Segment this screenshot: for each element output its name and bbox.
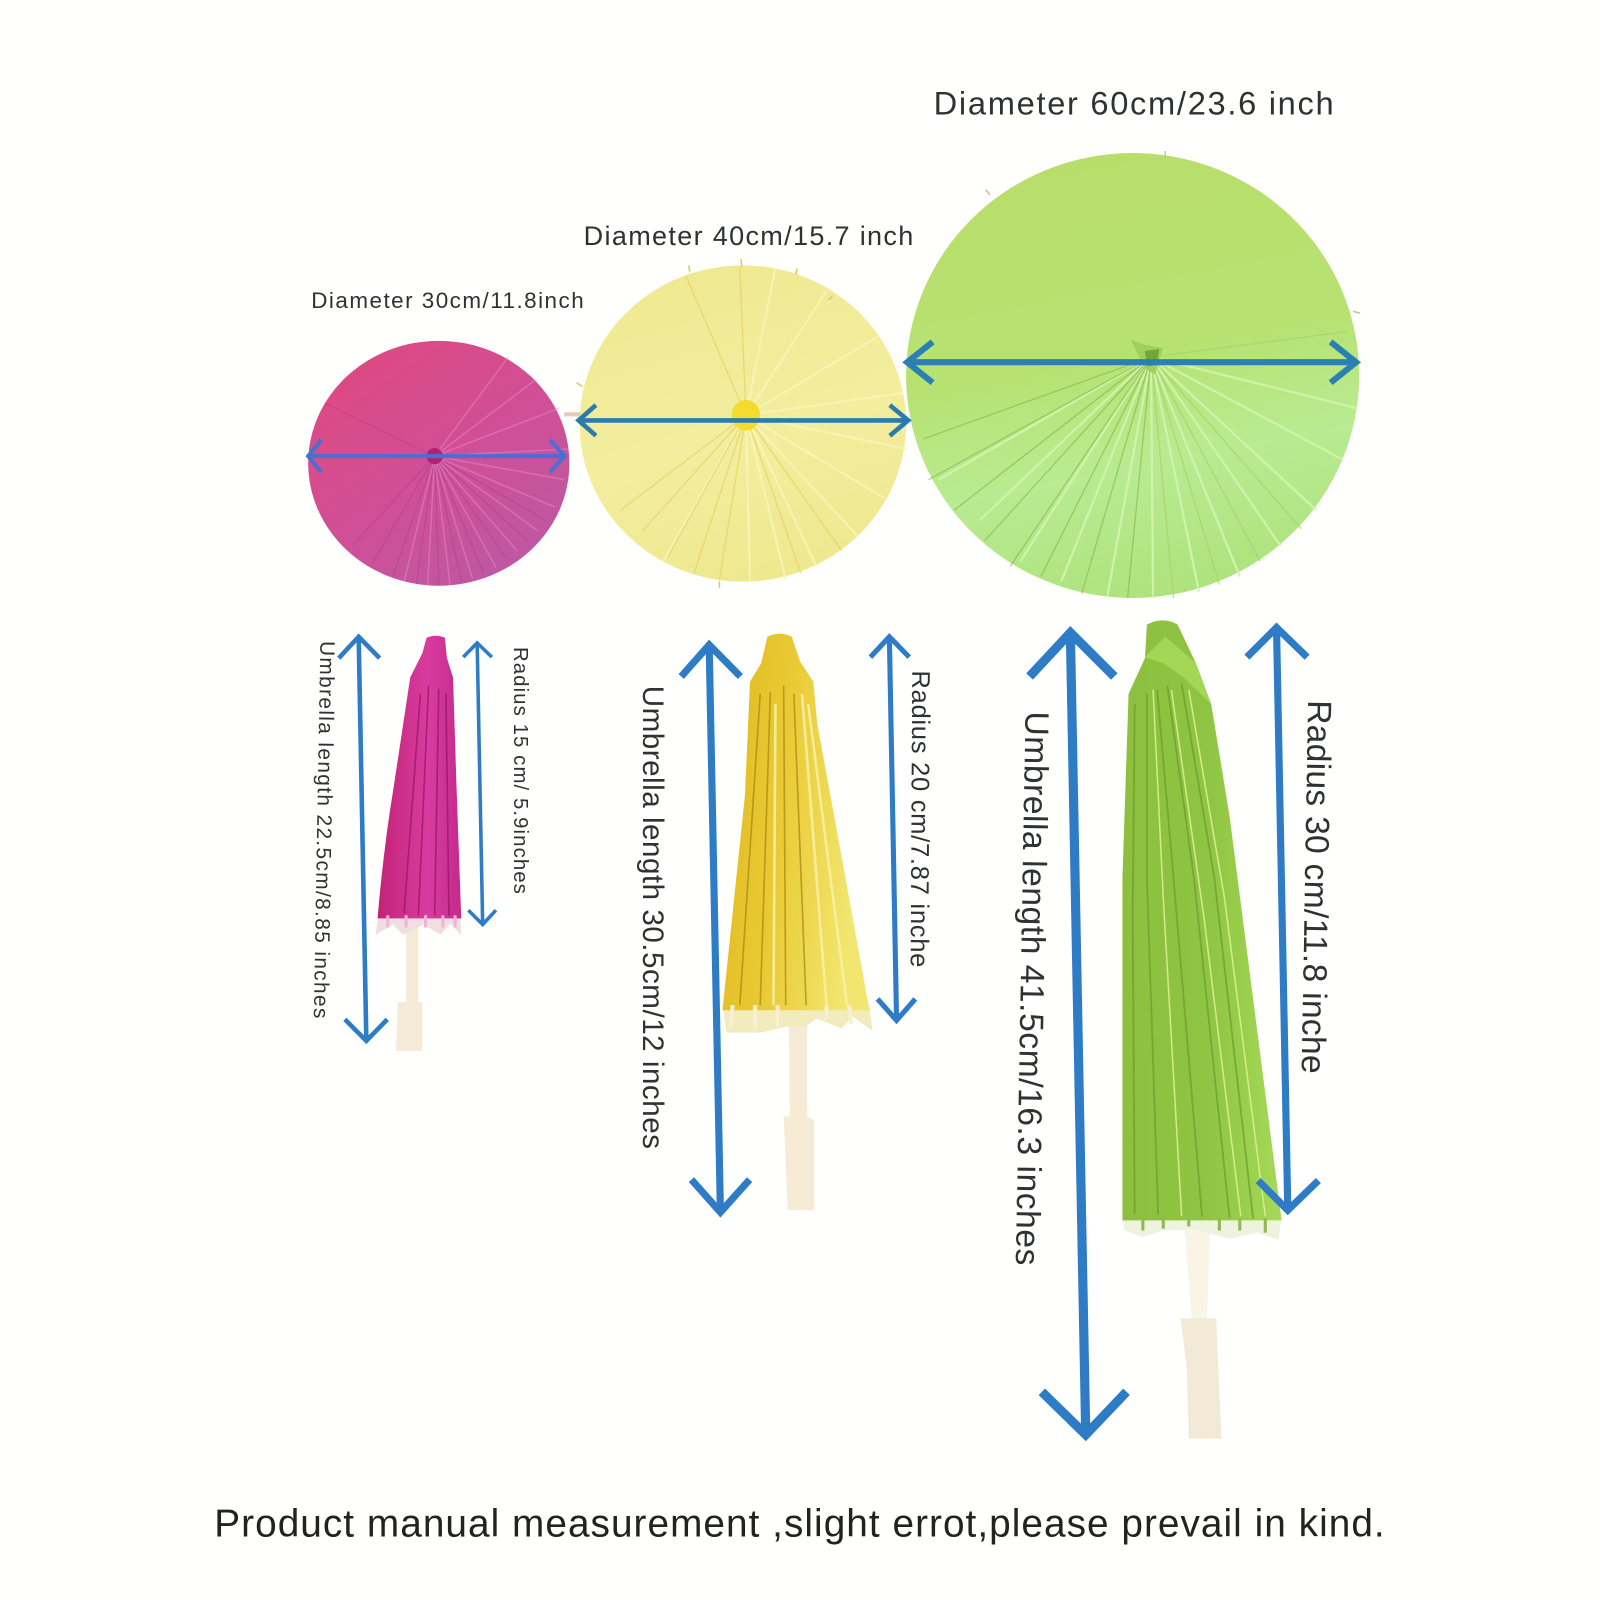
length arrow: green [1030, 633, 1127, 1435]
radius arrow: pink [463, 643, 496, 924]
label: yellow umbrella length: Umbrella length 30.5cm/12 inches [636, 686, 669, 1149]
length arrow: pink [339, 637, 387, 1041]
footer note: Product manual measurement ,slight errot,please prevail in kind. [214, 1503, 1385, 1546]
label: diameter 40cm: Diameter 40cm/15.7 inch [584, 221, 913, 251]
label: yellow umbrella radius: Radius 20 cm/7.87 inche [905, 670, 934, 967]
open umbrella: yellow [577, 259, 906, 588]
radius arrow: green [1247, 628, 1318, 1210]
closed umbrella: green [1122, 620, 1282, 1439]
closed umbrella: pink [376, 636, 461, 1051]
open umbrella: pink [308, 341, 581, 586]
label: pink umbrella length: Umbrella length 22.5cm/8.85 inches [309, 641, 338, 1019]
label: pink umbrella radius: Radius 15 cm/ 5.9inches [509, 647, 531, 894]
diameter arrow: yellow umbrella [579, 405, 908, 436]
label: green umbrella radius: Radius 30 cm/11.8 inche [1294, 700, 1337, 1074]
label: diameter 60cm: Diameter 60cm/23.6 inch [934, 84, 1334, 121]
label: diameter 30cm: Diameter 30cm/11.8inch [311, 288, 584, 313]
label: green umbrella length: Umbrella length 41.5cm/16.3 inches [1008, 711, 1055, 1266]
closed umbrella: yellow [722, 634, 872, 1210]
radius arrow: yellow [870, 637, 915, 1020]
diameter arrow: pink umbrella [308, 440, 564, 472]
length arrow: yellow [681, 645, 750, 1212]
open umbrella: green [906, 151, 1360, 598]
diameter arrow: green umbrella [907, 342, 1356, 383]
